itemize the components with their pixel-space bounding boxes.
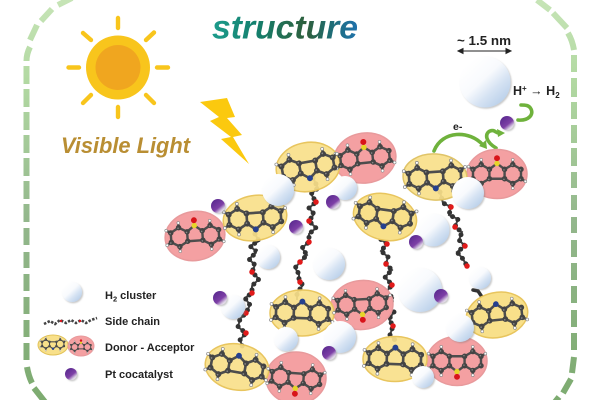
- unit: left donor-acceptor: [161, 190, 290, 265]
- side chain 2: [295, 178, 318, 300]
- legend label: Donor - Acceptor: Donor - Acceptor: [105, 342, 195, 354]
- donor-acceptor units: [161, 129, 532, 400]
- legend label: Side chain: Side chain: [105, 316, 160, 328]
- label: H+ to H2 reaction: H: [546, 84, 555, 98]
- legend icon: H2 cluster: [62, 282, 82, 302]
- legend label: Pt cocatalyst: Pt cocatalyst: [105, 369, 173, 381]
- unit: top centre donor-acceptor: [272, 129, 399, 197]
- icon: lightning bolt: [200, 98, 249, 164]
- unit: lower centre donor-acceptor: [270, 278, 395, 336]
- label: Visible Light: Visible Light: [61, 133, 192, 158]
- unit: bottom left donor-acceptor: [201, 339, 326, 400]
- label: H+ to H2 reaction: →: [527, 84, 546, 98]
- legend: [38, 282, 195, 381]
- side chain 3: [379, 224, 395, 340]
- double arrow: cluster diameter: [458, 48, 511, 54]
- legend label: H2 cluster: 2: [113, 294, 117, 304]
- Pt cocatalysts: [211, 116, 514, 360]
- H2 clusters: [221, 56, 510, 388]
- unit: right donor: [462, 287, 532, 343]
- size label: 1.5 nm: ~ 1.5 nm: [457, 33, 511, 48]
- legend label: H2 cluster: cluster: [117, 290, 157, 302]
- label: H+ to H2 reaction: H: [513, 84, 522, 98]
- legend icon: Pt cocatalyst: [65, 368, 77, 380]
- unit: centre right donor: [348, 187, 422, 247]
- label: H+ to H2 reaction: +: [522, 84, 527, 93]
- title: structure: structure: [212, 10, 358, 46]
- legend label: H2 cluster: H: [105, 290, 113, 302]
- label: electron: e-: [453, 121, 463, 133]
- unit: bottom right donor-acceptor: [363, 336, 487, 386]
- icon: sun: [68, 18, 168, 117]
- unit: top right donor-acceptor: [401, 150, 527, 202]
- legend icon: donor-acceptor: [38, 335, 94, 356]
- legend icon: side chain: [44, 318, 97, 324]
- side chain 4: [440, 192, 482, 297]
- arrows: electron transfer: [434, 105, 532, 151]
- side chain 1: [238, 234, 259, 348]
- side chains: [238, 178, 482, 348]
- label: H+ to H2 reaction: 2: [555, 91, 560, 100]
